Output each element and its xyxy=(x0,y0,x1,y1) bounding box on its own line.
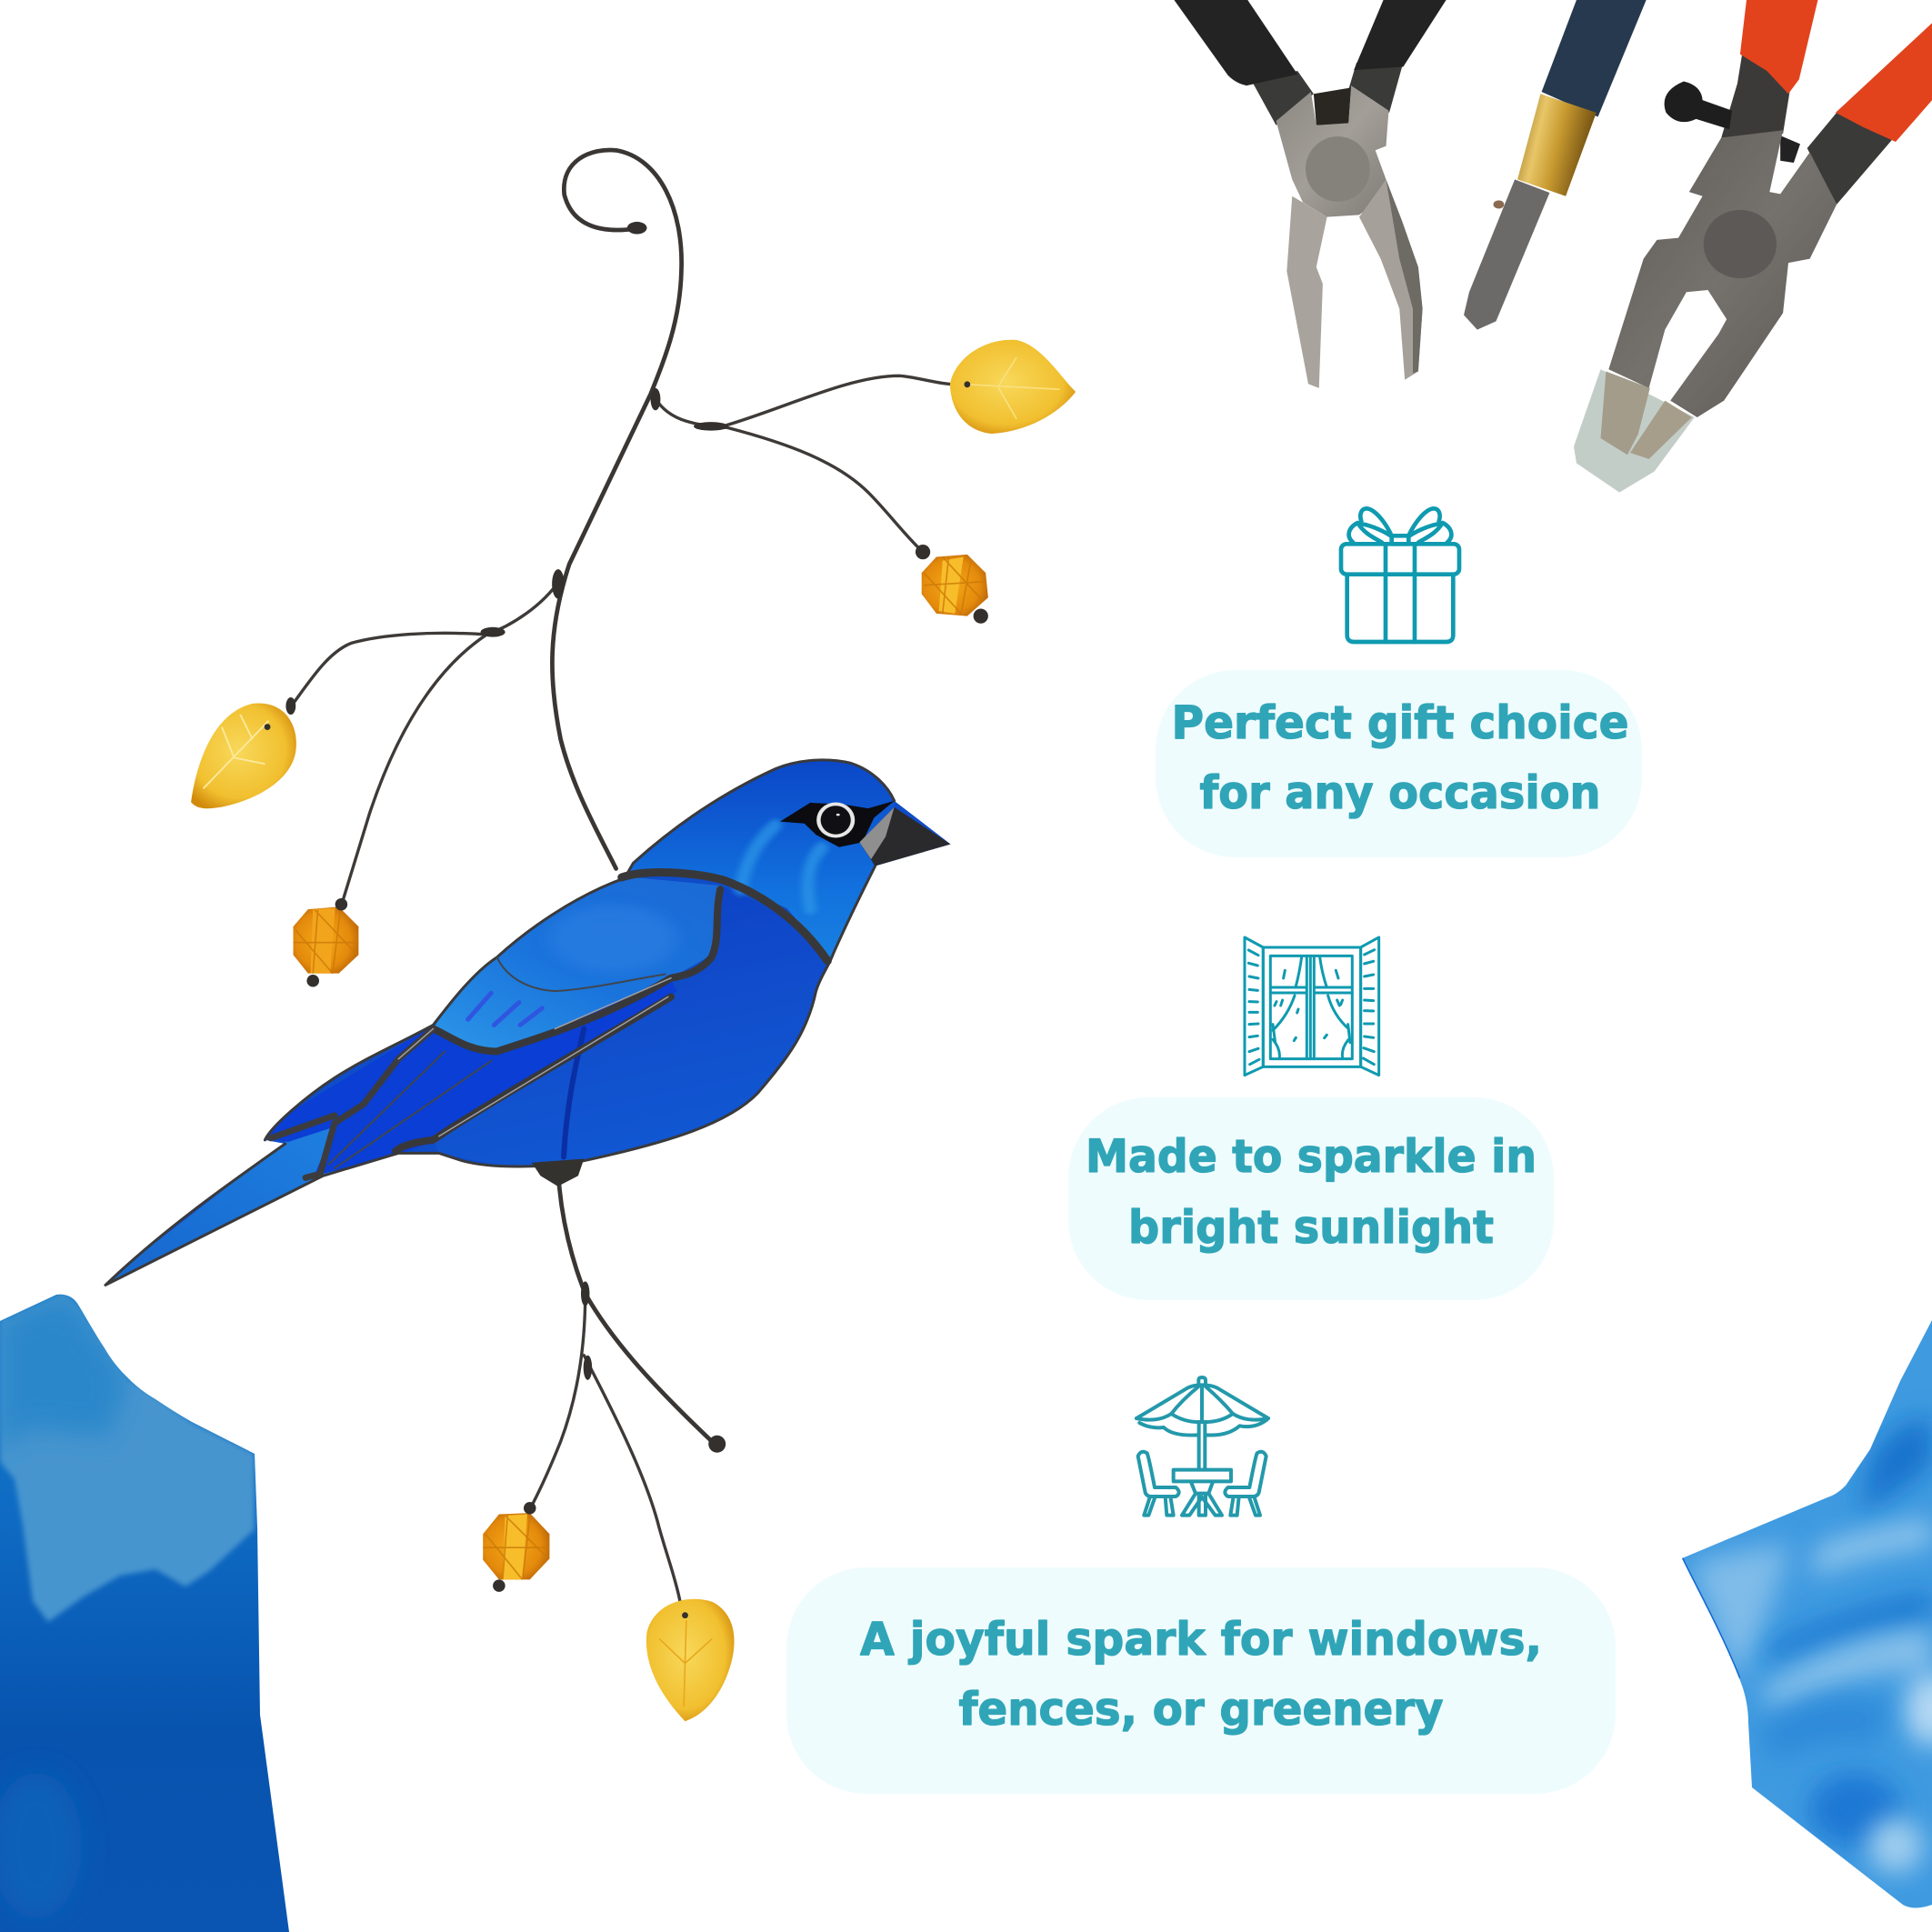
bird: primary feathers xyxy=(254,980,676,1176)
bird: lead outline xyxy=(105,760,895,1285)
bird: beak xyxy=(859,807,951,866)
wire: upper right twigs xyxy=(653,375,967,551)
text: bright sunlight: bright sunlight xyxy=(1128,1201,1494,1254)
bird: lead wing seams xyxy=(271,872,827,1177)
bird: tail xyxy=(113,1128,336,1280)
bird: eye xyxy=(816,802,855,837)
wire: left twigs xyxy=(289,579,561,906)
callout: sparkle xyxy=(1068,1097,1554,1300)
tool: glass cutter xyxy=(1464,0,1647,330)
leaf: top right xyxy=(950,340,1076,434)
hanging branch wires with leaves and beads xyxy=(191,150,1076,1721)
callout: joyful spark xyxy=(786,1567,1616,1794)
tool: right pliers xyxy=(1574,0,1932,493)
leaf: left xyxy=(191,703,296,808)
bead: left xyxy=(294,898,358,987)
icon: gift box xyxy=(1341,508,1459,642)
wire: lower twigs xyxy=(558,1170,715,1444)
text: a joyful spark: A joyful spark for windows, xyxy=(860,1613,1542,1666)
bird: wing highlight xyxy=(555,908,671,968)
bead: right xyxy=(916,545,988,624)
text: made to sparkle in: Made to sparkle in xyxy=(1086,1130,1537,1183)
bird: foot solder xyxy=(532,1159,584,1186)
bird: head and neck xyxy=(630,803,895,957)
text: for any occasion: for any occasion xyxy=(1200,766,1600,819)
leaf: lower xyxy=(646,1599,735,1721)
callout: perfect gift xyxy=(1156,670,1642,857)
tool: left pliers xyxy=(1174,0,1446,388)
bird: wing xyxy=(433,876,720,1051)
bird: colour streak xyxy=(564,1029,584,1157)
pill background xyxy=(1156,670,1642,857)
bird: eye mask xyxy=(780,801,895,847)
bird: wing feather marks xyxy=(468,993,542,1025)
text: fences or greenery: fences, or greenery xyxy=(958,1683,1444,1736)
bird: glass pieces xyxy=(91,750,961,1293)
icon: patio umbrella with table and chairs xyxy=(1136,1377,1268,1516)
pill background xyxy=(786,1567,1616,1794)
decorative glass shape: bottom right xyxy=(1673,1309,1932,1927)
bird: head light streak xyxy=(741,826,822,908)
text: perfect gift choice: Perfect gift choice xyxy=(1171,696,1629,749)
tools: three pliers and glass cutter xyxy=(1174,0,1932,493)
wire: main stem and hook xyxy=(552,150,682,868)
stained glass bluebird xyxy=(91,750,961,1293)
bead: lower xyxy=(483,1502,549,1592)
bird: belly xyxy=(445,887,760,1166)
icon: window with shutters xyxy=(1245,937,1379,1076)
pill background xyxy=(1068,1097,1554,1300)
decorative glass shape: bottom left xyxy=(0,1273,309,1932)
wire: solder joints xyxy=(285,222,728,1453)
